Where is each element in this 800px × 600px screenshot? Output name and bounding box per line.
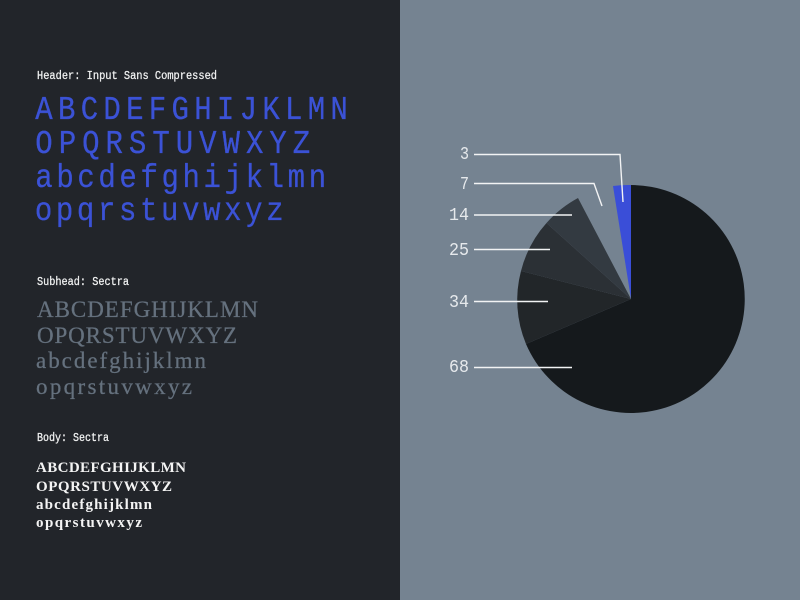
label 25: 25 xyxy=(449,241,469,261)
body uppercase first line: ABCDEFGHIJKLMN xyxy=(36,460,186,476)
header font label: Header: Input Sans Compressed xyxy=(37,70,217,83)
pie slice: 14 xyxy=(546,198,631,299)
pie chart xyxy=(517,185,745,413)
subhead font label: Subhead: Sectra xyxy=(37,276,129,289)
label 3: 3 xyxy=(460,145,469,165)
header uppercase second line: OPQRSTUVWXYZ xyxy=(35,126,316,164)
body lowercase first line: abcdefghijklmn xyxy=(36,497,153,513)
header font specimen xyxy=(35,70,353,231)
header lowercase second line: opqrstuvwxyz xyxy=(35,193,287,231)
label 68: 68 xyxy=(449,358,469,378)
pie slice: 3 xyxy=(613,185,631,299)
body lowercase second line: opqrstuvwxyz xyxy=(36,515,142,531)
subhead uppercase first line: ABCDEFGHIJKLMN xyxy=(37,297,258,322)
header uppercase first line: ABCDEFGHIJKLMN xyxy=(35,92,353,130)
header lowercase first line: abcdefghijklmn xyxy=(35,160,330,198)
pie slice: 68 xyxy=(526,185,745,413)
subhead lowercase second line: opqrstuvwxyz xyxy=(36,374,192,399)
label 7: 7 xyxy=(460,175,469,195)
leader line 14 xyxy=(474,214,572,216)
leader line 3 xyxy=(474,154,623,202)
label 14: 14 xyxy=(449,206,469,226)
leader line 34 xyxy=(474,300,548,302)
subhead lowercase first line: abcdefghijklmn xyxy=(36,348,206,373)
label 34: 34 xyxy=(449,293,469,313)
body uppercase second line: OPQRSTUVWXYZ xyxy=(36,479,172,495)
subhead uppercase second line: OPQRSTUVWXYZ xyxy=(37,323,237,348)
leader line 25 xyxy=(474,248,550,250)
panel: type specimens background xyxy=(0,0,400,600)
subhead font specimen xyxy=(36,276,258,399)
leader line 7 xyxy=(474,184,602,206)
body font specimen xyxy=(36,432,186,531)
leader line 68 xyxy=(474,366,572,368)
body font label: Body: Sectra xyxy=(37,432,109,445)
panel: chart background xyxy=(400,0,800,600)
chart labels and leader lines xyxy=(449,145,623,378)
pie slice: 25 xyxy=(521,223,631,299)
pie slice: 34 xyxy=(517,271,631,344)
